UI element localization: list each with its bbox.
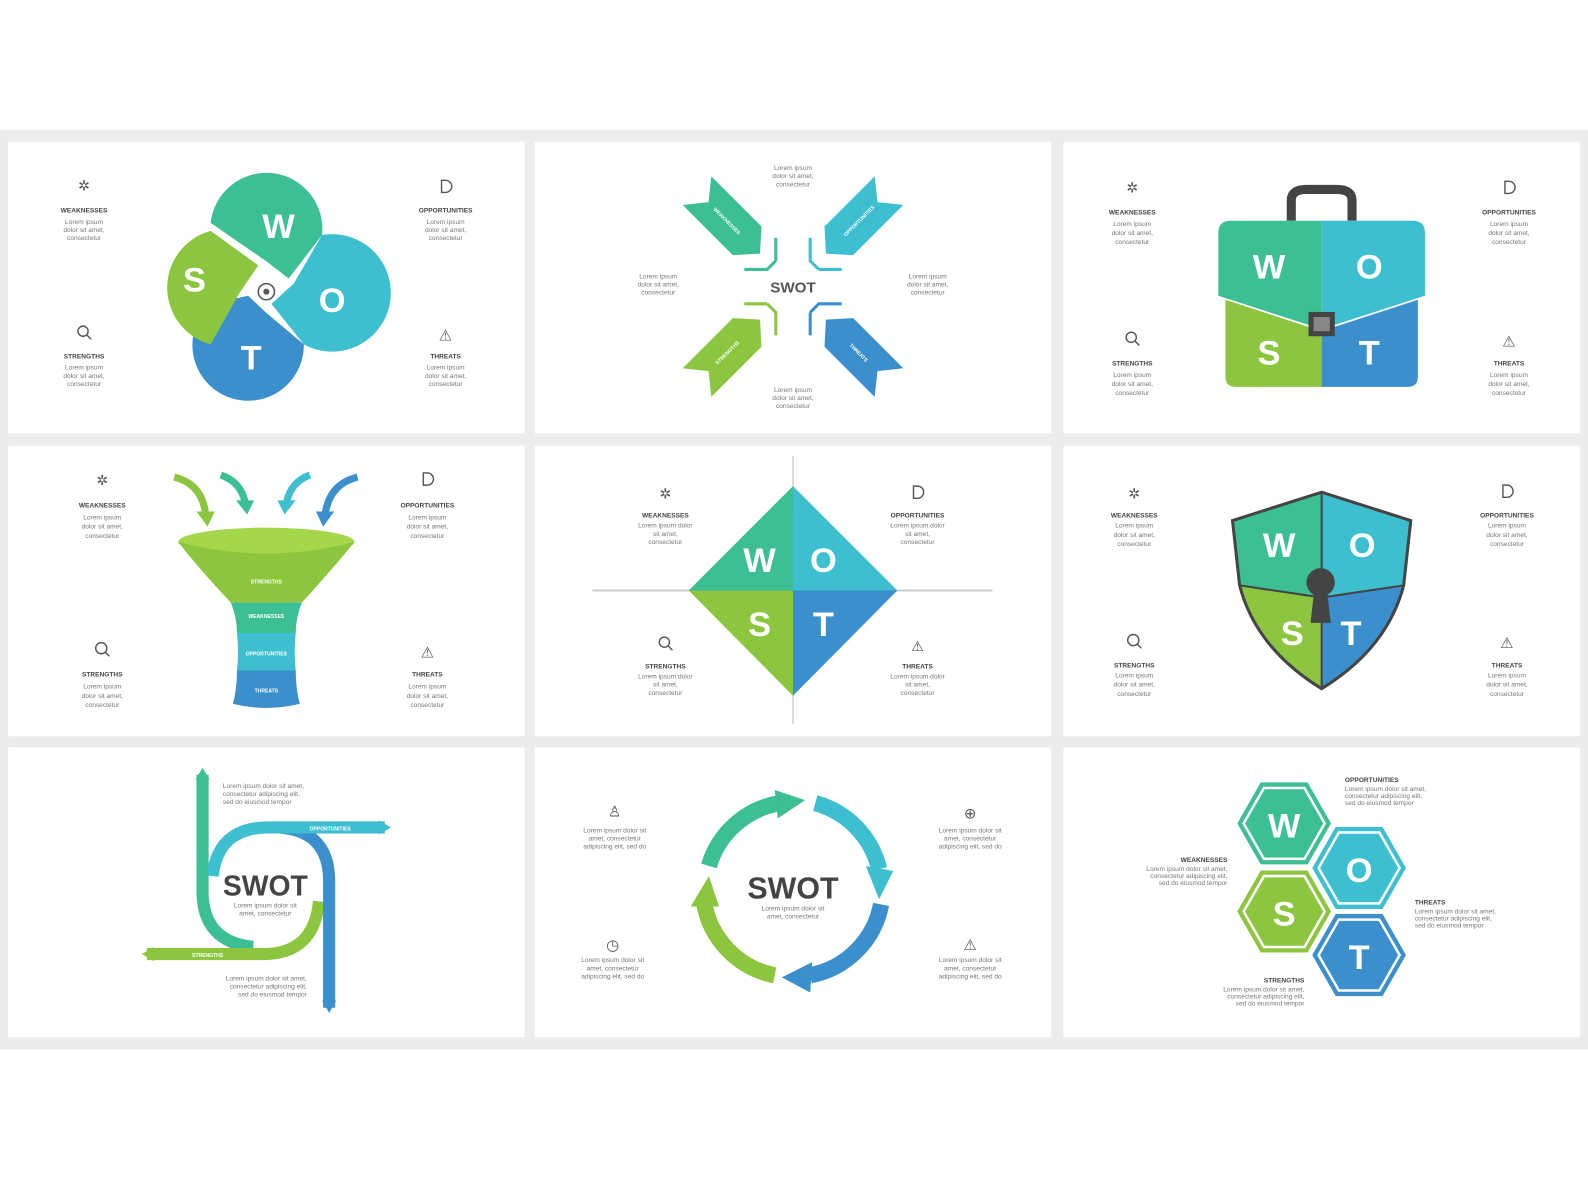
text threats: Lorem ipsum [427, 365, 465, 372]
panel 4: funnel: Lorem ipsum [408, 684, 447, 691]
panel 3: briefcase: ⚠ [1502, 333, 1516, 350]
texts: Lorem ipsum [774, 165, 813, 172]
panel 4: funnel: consectetur [85, 702, 120, 709]
panel 8: cycle: amet, consectetur [944, 836, 997, 843]
panel 7: swirl: sed do eiusmod tempor [223, 799, 292, 806]
lobe S [167, 231, 258, 344]
panel 2: converging arrows: consectetur [641, 290, 676, 297]
panel 8: cycle: amet, consectetur [589, 836, 642, 843]
panel 6: shield: Lorem ipsum [1115, 523, 1154, 530]
text weaknesses: Lorem ipsum [65, 219, 104, 226]
shield: S [1281, 615, 1304, 653]
text threats: THREATS [430, 354, 462, 361]
panel 3: briefcase: consectetur [1492, 239, 1527, 246]
panel 9: hexagons: consectetur adipiscing elit, [1227, 994, 1305, 1001]
panel 3: briefcase: Lorem ipsum [1113, 372, 1152, 379]
panel 9: hexagons: sed do eiusmod tempor [1345, 800, 1414, 807]
panel 4: funnel: consectetur [410, 533, 445, 540]
panel 8: cycle: SWOT [747, 871, 839, 905]
panel 5: diamond: consectetur [901, 539, 935, 546]
panel 6: shield: ⚠ [1500, 635, 1514, 652]
panel 5: diamond: consectetur [648, 539, 683, 546]
panel 7: swirl [8, 747, 525, 1037]
panel 8: cycle: amet, consectetur [587, 965, 640, 972]
panel 9: hexagons: S [1273, 896, 1296, 934]
panel 5: diamond: ⚠ [911, 639, 924, 655]
panel 7: swirl: Lorem ipsum dolor sit [234, 902, 297, 909]
panel 6: shield: Lorem ipsum [1488, 673, 1527, 680]
panel 8: cycle: Lorem ipsum dolor sit [583, 828, 646, 835]
panel 5: diamond: WEAKNESSES [642, 513, 689, 520]
panel 2: converging arrows: dolor sit amet, [638, 282, 679, 289]
panel 3: briefcase: dolor sit amet, [1112, 381, 1153, 388]
panel 8: cycle: Lorem ipsum dolor sit [939, 957, 1002, 964]
lobe O [271, 234, 391, 352]
panel 8: cycle: ♙ [608, 803, 622, 820]
panel 5: diamond [535, 446, 1051, 736]
briefcase body: W [1253, 249, 1286, 287]
arrow O: OPPORTUNITIES [843, 204, 877, 238]
panel 6: shield: consectetur [1117, 691, 1152, 698]
panel 9: hexagons: Lorem ipsum dolor sit amet, [1146, 866, 1228, 873]
panel 7: swirl: consectetur adipiscing elit, [223, 791, 300, 798]
panel 8: cycle: ⊕ [964, 805, 977, 822]
panel 7: swirl: OPPORTUNITIES [310, 826, 351, 832]
panel 9: hexagons: OPPORTUNITIES [1345, 777, 1399, 784]
panel 9: hexagons: WEAKNESSES [1181, 857, 1228, 864]
panel 3: briefcase: Lorem ipsum [1490, 221, 1529, 228]
funnel: OPPORTUNITIES [246, 651, 288, 657]
panel 6: shield: consectetur [1490, 691, 1525, 698]
text weaknesses: dolor sit amet, [63, 227, 105, 234]
panel 9: hexagons: Lorem ipsum dolor sit amet, [1223, 987, 1305, 994]
diamond quadrants: S [748, 606, 771, 644]
arrow W: WEAKNESSES [712, 207, 742, 237]
panel 3: briefcase [1063, 142, 1580, 433]
text threats [425, 327, 466, 388]
panel 2: converging arrows: dolor sit amet, [772, 395, 814, 402]
briefcase body [1218, 221, 1425, 387]
panel 9: hexagons: Lorem ipsum dolor sit amet, [1345, 786, 1426, 793]
panel 8: cycle: adipiscing elit, sed do [581, 973, 645, 980]
panel 6: shield: consectetur [1117, 541, 1152, 548]
panel 4: funnel: dolor sit amet, [407, 524, 448, 531]
cycle arrows [704, 803, 881, 975]
panel 8: cycle: Lorem ipsum dolor sit [762, 906, 825, 913]
panel 5: diamond: Lorem ipsum dolor [890, 674, 946, 681]
arrow T: THREATS [848, 343, 869, 364]
text weaknesses: ✲ [78, 178, 90, 194]
panel 9: hexagons: sed do eiusmod tempor [1159, 880, 1228, 887]
text strengths: consectetur [67, 381, 102, 388]
panel 9: hexagons: consectetur adipiscing elit, [1345, 793, 1422, 800]
panel 4: funnel: Lorem ipsum [83, 684, 122, 691]
panel 6: shield: dolor sit amet, [1486, 532, 1528, 539]
text opportunities: OPPORTUNITIES [419, 208, 473, 215]
panel 3: briefcase: ✲ [1126, 180, 1138, 196]
panel 8: cycle: amet, consectetur [944, 965, 997, 972]
panel 5: diamond: consectetur [901, 690, 935, 697]
panel 5: diamond: sit amet, [905, 682, 930, 689]
panel 3: briefcase: dolor sit amet, [1488, 381, 1530, 388]
panel 8: cycle: adipiscing elit, sed do [583, 844, 647, 851]
panel 3: briefcase: OPPORTUNITIES [1482, 210, 1536, 217]
panel 9: hexagons: STRENGTHS [1264, 977, 1305, 984]
panel 9: hexagons: THREATS [1415, 899, 1446, 906]
panel 5: diamond: THREATS [902, 663, 933, 670]
panel 6: shield: dolor sit amet, [1486, 682, 1528, 689]
lobe W: W [262, 208, 295, 246]
panel 3: briefcase: Lorem ipsum [1113, 221, 1152, 228]
panel 3: briefcase: consectetur [1115, 390, 1150, 397]
text threats: dolor sit amet, [425, 373, 466, 380]
shield [1233, 492, 1411, 689]
panel 2: converging arrows: Lorem ipsum [774, 387, 813, 394]
briefcase body: O [1356, 249, 1383, 287]
panel 3: briefcase: WEAKNESSES [1109, 210, 1156, 217]
funnel [178, 528, 354, 708]
briefcase body: S [1257, 335, 1280, 373]
funnel: THREATS [255, 689, 279, 695]
panel 4: funnel: ⚠ [421, 644, 434, 661]
diamond quadrants [689, 486, 897, 696]
panel 3: briefcase: dolor sit amet, [1112, 230, 1153, 237]
panel 2: converging arrows: consectetur [911, 290, 945, 297]
title SWOT: SWOT [770, 280, 816, 297]
texts: consectetur [776, 181, 811, 188]
lobe W [211, 173, 322, 279]
arrow S [681, 292, 787, 398]
text strengths [63, 326, 105, 388]
swirl bars [147, 775, 385, 1008]
panel 6: shield: WEAKNESSES [1111, 513, 1158, 520]
panel 2: converging arrows [535, 142, 1051, 433]
panel 4: funnel: Lorem ipsum [408, 515, 447, 522]
panel 7: swirl: SWOT [223, 870, 309, 902]
panel 5: diamond: sit amet, [653, 531, 678, 538]
text opportunities: consectetur [429, 235, 463, 242]
panel 3: briefcase: Lorem ipsum [1490, 372, 1529, 379]
panel 7: swirl: sed do eiusmod tempor [238, 992, 308, 999]
panel 9: hexagons: O [1346, 852, 1373, 890]
text strengths: STRENGTHS [64, 354, 105, 361]
shield: T [1340, 615, 1362, 653]
arrow S: STRENGTHS [715, 340, 741, 366]
shield: W [1263, 527, 1296, 565]
panel 3: briefcase: consectetur [1115, 239, 1150, 246]
panel 2: converging arrows: Lorem ipsum [909, 274, 947, 281]
panel 6: shield: ✲ [1128, 486, 1140, 502]
lobe T: T [241, 340, 262, 378]
panel 5: diamond: OPPORTUNITIES [891, 513, 945, 520]
panel 6: shield: consectetur [1490, 541, 1525, 548]
texts [772, 165, 814, 188]
panel 7: swirl: amet, consectetur [239, 911, 292, 918]
panel 4: funnel: THREATS [412, 672, 443, 679]
panel 8: cycle: adipiscing elit, sed do [939, 844, 1002, 851]
panel 4: funnel: dolor sit amet, [82, 693, 123, 700]
funnel: WEAKNESSES [248, 614, 285, 620]
panel 7: swirl: STRENGTHS [192, 953, 224, 959]
panel 6: shield: dolor sit amet, [1114, 682, 1155, 689]
panel 6: shield: OPPORTUNITIES [1480, 513, 1534, 520]
shield: O [1349, 527, 1376, 565]
panel 3: briefcase: STRENGTHS [1112, 361, 1153, 368]
diamond quadrants: O [810, 542, 837, 580]
lobe S: S [183, 262, 206, 300]
panel 6: shield: Lorem ipsum [1488, 523, 1527, 530]
texts: dolor sit amet, [772, 173, 814, 180]
panel 3: briefcase: consectetur [1492, 390, 1527, 397]
panel 5: diamond: Lorem ipsum dolor [638, 523, 693, 530]
funnel: STRENGTHS [251, 579, 283, 585]
panel 2: converging arrows: Lorem ipsum [639, 274, 678, 281]
panel 8: cycle: ⚠ [963, 937, 977, 954]
panel 8: cycle: ◷ [606, 937, 619, 954]
briefcase body: T [1359, 335, 1380, 373]
arrow W [681, 175, 787, 281]
panel 5: diamond: ✲ [659, 486, 671, 502]
panel 4: funnel: OPPORTUNITIES [401, 502, 455, 509]
text threats: ⚠ [439, 327, 452, 344]
panel 2: converging arrows: consectetur [776, 403, 811, 410]
text weaknesses: consectetur [67, 235, 102, 242]
panel 8: cycle: adipiscing elit, sed do [939, 973, 1002, 980]
panel 9: hexagons: consectetur adipiscing elit, [1150, 873, 1228, 880]
panel 9: hexagons: sed do eiusmod tempor [1415, 923, 1484, 930]
panel 1: lobes [8, 142, 525, 433]
panel 6: shield [1063, 446, 1580, 736]
panel 8: cycle: amet, consectetur [767, 914, 820, 921]
panel 5: diamond: Lorem ipsum dolor [890, 523, 946, 530]
panel 4: funnel: ✲ [96, 473, 108, 489]
panel 7: swirl: consectetur adipiscing elit, [230, 983, 307, 990]
panel 9: hexagons: T [1349, 939, 1370, 977]
panel 9: hexagons: sed do eiusmod tempor [1236, 1001, 1305, 1008]
arrow T [799, 292, 905, 398]
panel 5: diamond: sit amet, [905, 531, 930, 538]
diamond quadrants: T [813, 606, 834, 644]
panel 6: shield: dolor sit amet, [1114, 532, 1155, 539]
handle [1291, 189, 1352, 221]
panel 4: funnel: STRENGTHS [82, 672, 123, 679]
panel 2: converging arrows: dolor sit amet, [907, 282, 949, 289]
panel 4: funnel: consectetur [410, 702, 445, 709]
panel 5: diamond: STRENGTHS [645, 663, 686, 670]
panel 8: cycle [535, 747, 1051, 1037]
panel 9: hexagons: W [1268, 808, 1301, 846]
panel 4: funnel: dolor sit amet, [407, 693, 448, 700]
panel 9: hexagons [1063, 747, 1580, 1037]
text strengths: dolor sit amet, [63, 373, 105, 380]
panel 3: briefcase: THREATS [1494, 361, 1525, 368]
panel 4: funnel: dolor sit amet, [82, 524, 123, 531]
panel 9: hexagons: consectetur adipiscing elit, [1415, 916, 1492, 923]
text strengths: Lorem ipsum [65, 365, 104, 372]
text opportunities: dolor sit amet, [425, 227, 466, 234]
panel 5: diamond: Lorem ipsum dolor [638, 674, 693, 681]
arrows into funnel [174, 475, 358, 527]
diamond quadrants: W [743, 542, 776, 580]
panel 5: diamond: sit amet, [653, 682, 678, 689]
panel 8: cycle: Lorem ipsum dolor sit [581, 957, 644, 964]
panel 6: shield: THREATS [1492, 662, 1523, 669]
panel 4: funnel: Lorem ipsum [83, 515, 122, 522]
panel 6: shield: STRENGTHS [1114, 662, 1155, 669]
panel 6: shield: Lorem ipsum [1115, 673, 1154, 680]
panel 5: diamond: consectetur [648, 690, 683, 697]
panel 4: funnel: consectetur [85, 533, 120, 540]
text opportunities: Lorem ipsum [427, 219, 465, 226]
panel 4: funnel: WEAKNESSES [79, 502, 126, 509]
lobe T [192, 296, 304, 401]
panel 7: swirl: Lorem ipsum dolor sit amet, [226, 975, 307, 982]
panel 9: hexagons: Lorem ipsum dolor sit amet, [1415, 909, 1496, 916]
panel 4: funnel [8, 446, 525, 736]
text weaknesses [61, 178, 108, 242]
lobe O: O [319, 282, 346, 320]
arrow O [799, 175, 905, 281]
text weaknesses: WEAKNESSES [61, 208, 108, 215]
panel 7: swirl: Lorem ipsum dolor sit amet, [223, 783, 304, 790]
text opportunities [419, 180, 473, 242]
text threats: consectetur [429, 381, 463, 388]
icon target [258, 284, 274, 300]
panel 8: cycle: Lorem ipsum dolor sit [939, 828, 1002, 835]
panel 3: briefcase: dolor sit amet, [1488, 230, 1530, 237]
